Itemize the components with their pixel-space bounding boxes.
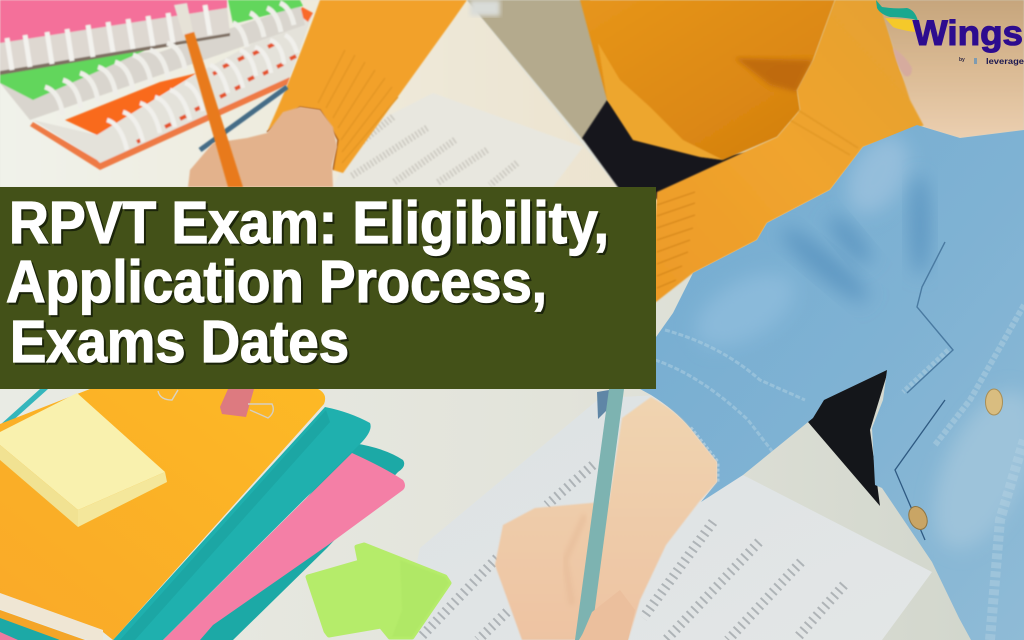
logo small icon [974,58,977,64]
green notebook pages [0,5,305,120]
blue pen [200,87,287,150]
logo swoosh teal [876,0,918,21]
black gap behind sleeve [808,358,892,506]
logo swoosh yellow [885,18,915,32]
logo byline: by [959,57,965,63]
title banner [0,187,656,389]
floor [467,0,612,140]
notebooks stack [0,0,313,170]
logo wordmark: Wings [913,14,1023,53]
white object on floor [470,0,500,16]
title text: Exams Dates [10,309,349,375]
placket seams [935,305,1024,445]
desk surface, upper [0,0,617,187]
bottom-left layers [0,612,60,640]
shirt buttons [905,389,1002,532]
answer sheet, lower [400,395,932,640]
shirt folds and highlights [844,132,912,216]
lower teal folder [187,443,404,640]
teal pencil [575,389,624,640]
face [878,0,1024,138]
pink notebook cover [0,0,227,44]
green arrow sticky note [308,545,449,637]
pink folder [163,453,405,640]
sticky note pad [0,393,167,527]
orange pencil [174,3,243,187]
finger over pencil [580,590,635,640]
back teal strip [0,389,48,432]
orange notebook pages [33,13,313,163]
orange notebook edge [30,77,290,170]
yellow book [0,389,325,640]
printed number columns [420,465,844,640]
red marks between rings [137,44,296,142]
logo: Wings by leverage [876,0,1024,66]
orange notebook cover [65,73,197,135]
notebook rings [7,5,210,70]
green notebook cover [0,46,155,100]
black trousers [582,100,780,200]
left hand [188,107,337,187]
orange sweater torso [580,0,835,160]
teal folder [113,407,371,640]
writing arm and hand [495,397,717,640]
cuff stitching [655,330,805,455]
title text: Application Process, [6,249,547,315]
lips [893,48,912,76]
title text: RPVT Exam: Eligibility, [9,190,609,256]
cuff fragment behind pencil [597,389,615,419]
orange sweater sleeve, left person [267,0,467,173]
pocket flap seams [907,242,953,393]
book pages [0,593,103,640]
denim shirt [640,125,1024,640]
binder clip [158,389,273,418]
answer sheet, upper [333,93,583,187]
photo: upper scene [0,0,1024,302]
pink notebook pages [0,8,230,72]
logo leverage text: leverage [986,57,1024,66]
stacked folders [0,389,405,640]
title text [6,190,609,375]
orange sweater arm [650,0,925,302]
